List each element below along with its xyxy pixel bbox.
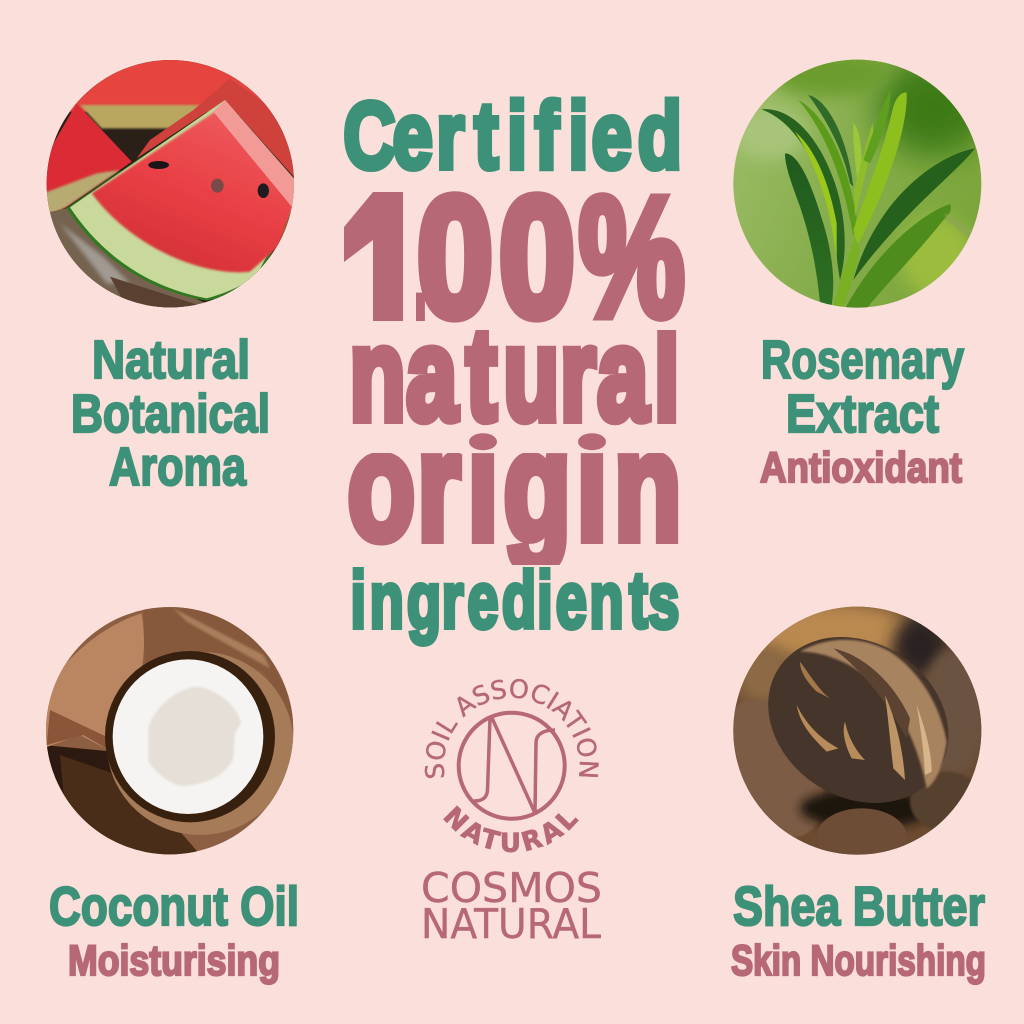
label: Rosemary Extract Antioxidant: Extract — [786, 384, 939, 444]
label: Natural Botanical Aroma — [71, 330, 270, 497]
photo: coconut — [43, 605, 300, 862]
label: Natural Botanical Aroma: Aroma — [109, 437, 247, 497]
heading: natural: natural — [350, 301, 679, 447]
heading: origin: origin — [348, 401, 681, 572]
label: Coconut Oil Moisturising: Moisturising — [68, 937, 280, 985]
label: Rosemary Extract Antioxidant: Rosemary — [761, 330, 964, 390]
label: Natural Botanical Aroma: Natural — [92, 330, 250, 390]
heading: 100%: 100 — [349, 162, 575, 352]
heading: ingredients: ingredients — [350, 555, 679, 645]
label: Rosemary Extract Antioxidant: Antioxidant — [760, 444, 962, 492]
label: Coconut Oil Moisturising: Coconut Oil — [49, 875, 299, 937]
photo: watermelon — [46, 60, 294, 308]
text: Cosmos Natural: COSMOS — [421, 864, 602, 912]
label: Rosemary Extract Antioxidant — [760, 330, 964, 492]
logo: Soil Association Natural: SOIL ASSOCIATION — [424, 678, 599, 778]
heading: Certified: Certified — [343, 82, 682, 188]
large nut — [768, 637, 948, 803]
label: Coconut Oil Moisturising — [49, 875, 299, 985]
text: Cosmos Natural: NATURAL — [421, 900, 601, 948]
leaves — [762, 91, 975, 308]
heading: 100%: % — [579, 163, 685, 353]
heading: 100% — [344, 191, 685, 323]
label: Shea Butter Skin Nourishing — [731, 875, 986, 985]
photo: shea nut — [733, 606, 982, 855]
photo: rosemary — [730, 50, 990, 313]
label: Natural Botanical Aroma: Botanical — [71, 384, 270, 444]
logo: Soil Association Natural — [424, 678, 599, 852]
text: Cosmos Natural — [421, 864, 602, 948]
logo: Soil Association Natural: NATURAL — [443, 806, 579, 852]
